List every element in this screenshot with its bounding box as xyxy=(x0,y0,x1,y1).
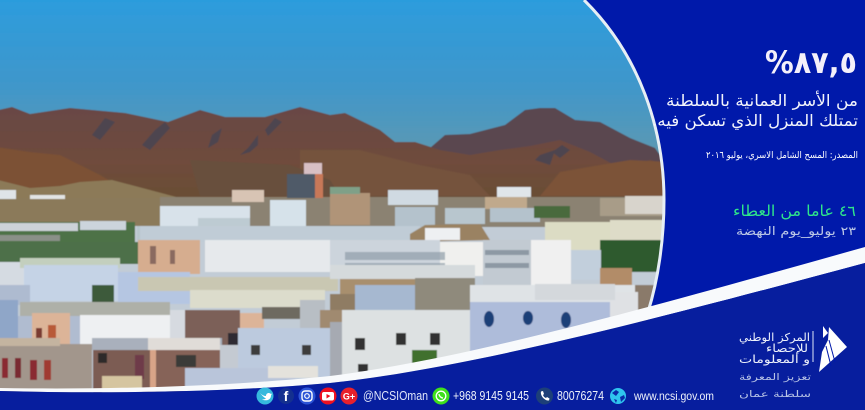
text: website: www.ncsi.gov.om xyxy=(633,391,714,403)
statistic: 87.5 percent: %٨٧,٥ xyxy=(765,45,857,81)
text: green anniversary line: ٤٦ عاما من العطاء xyxy=(733,202,856,220)
icon: facebook: f xyxy=(284,388,289,404)
icon: google plus: G+ xyxy=(343,392,355,402)
icon: google plus xyxy=(340,388,358,404)
logo: tagline: سلطنة عمان xyxy=(739,390,811,400)
text block: statistic description xyxy=(652,90,858,131)
text block: statistic description: تمتلك المنزل الذي تسكن فيه. xyxy=(652,111,858,131)
logo: NCSI name: المركز الوطني xyxy=(739,331,810,344)
logo: NCSI name: للإحصاء xyxy=(766,342,808,355)
bottom band: blue xyxy=(0,263,865,410)
icon: twitter xyxy=(256,388,274,404)
arc: white photo edge xyxy=(584,0,664,312)
icon: globe xyxy=(610,388,626,404)
text: social handle: @NCSIOman xyxy=(363,389,428,403)
logo: NCSI name: و المعلومات xyxy=(739,353,810,366)
photo: Muscat skyline xyxy=(0,0,690,410)
text block: statistic description: من الأسر العمانية بالسلطنة xyxy=(666,90,858,111)
text: phone number: 80076274 xyxy=(557,389,604,403)
text: whatsapp number: +968 9145 9145 xyxy=(453,389,529,403)
icon: instagram xyxy=(298,388,316,404)
bottom swoosh: white band xyxy=(0,247,865,392)
logo: NCSI mark xyxy=(819,326,847,372)
icon: whatsapp xyxy=(432,388,450,404)
logo: tagline: تعزيز المعرفة xyxy=(739,373,812,383)
logo: NCSI name xyxy=(739,331,813,366)
text: renaissance day line: ٢٣ يوليو_يوم النهضة xyxy=(736,224,857,239)
icon: facebook xyxy=(278,388,294,404)
icon: phone xyxy=(536,388,553,404)
icon: youtube xyxy=(320,388,336,404)
logo: tagline xyxy=(739,373,812,400)
